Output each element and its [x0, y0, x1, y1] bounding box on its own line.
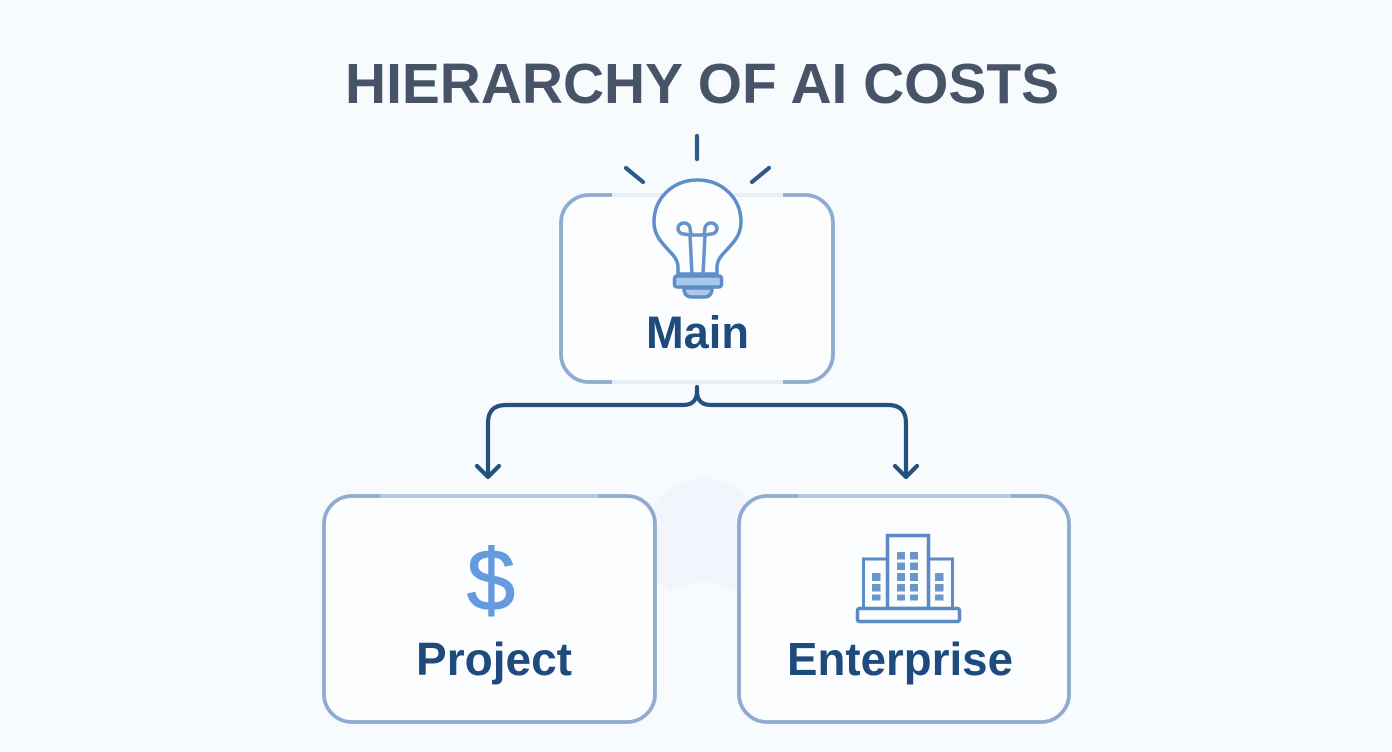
- connector arrows: [477, 387, 917, 477]
- panel: enterprise: [739, 496, 1069, 722]
- icon: light bulb: [626, 136, 769, 297]
- label: project: Project: [416, 633, 572, 685]
- label: enterprise: Enterprise: [787, 633, 1013, 685]
- panel: main: [561, 136, 833, 382]
- icon: office buildings: [858, 536, 960, 622]
- panel: project: [324, 496, 655, 722]
- title: HIERARCHY OF AI COSTS: [345, 52, 1059, 116]
- icon: dollar sign: $: [467, 532, 515, 629]
- label: main: Main: [646, 307, 749, 358]
